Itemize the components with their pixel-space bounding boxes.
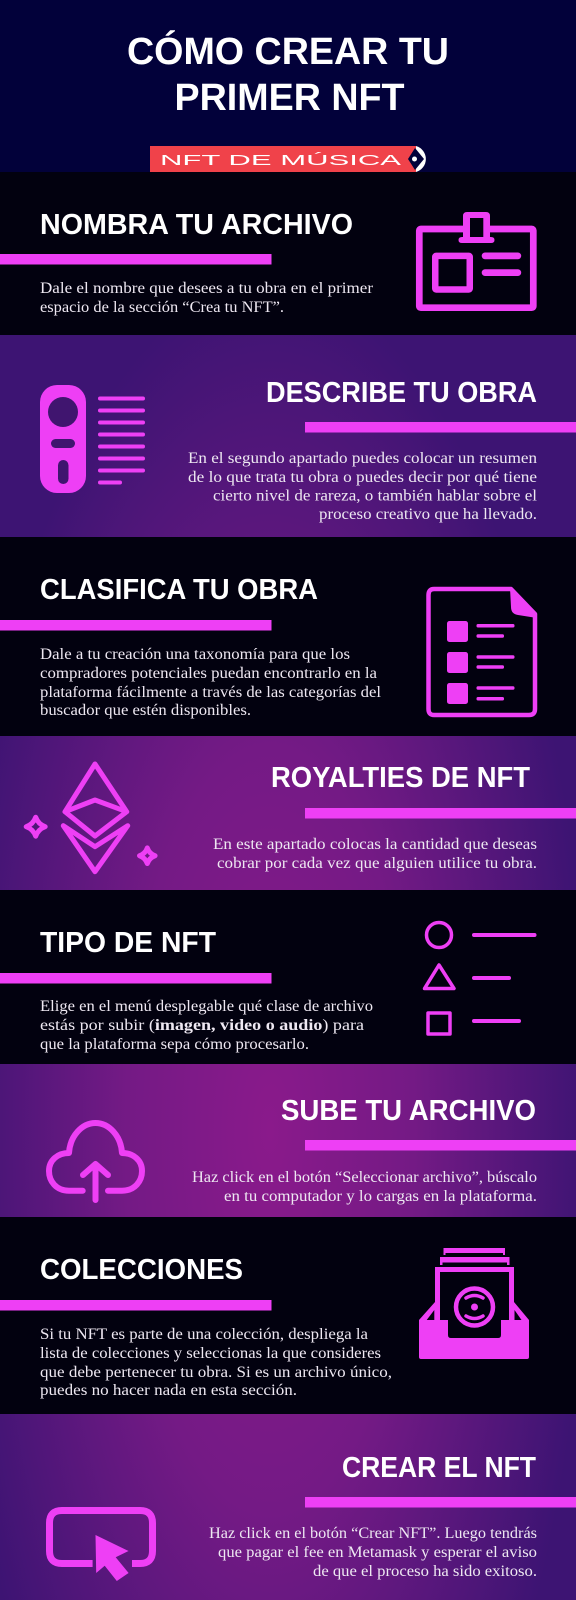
body text xyxy=(188,450,538,523)
accent bar xyxy=(0,973,272,984)
body text xyxy=(40,280,374,316)
icon: document with list xyxy=(428,588,537,715)
logo: NFT de Música xyxy=(150,146,426,172)
accent bar xyxy=(305,1140,576,1150)
panel: colecciones xyxy=(0,1217,576,1414)
body text: de que el proceso ha sido exitoso. xyxy=(313,1563,537,1580)
body text: que la plataforma sepa cómo procesarlo. xyxy=(40,1036,309,1053)
heading: ROYALTIES DE NFT xyxy=(271,762,530,794)
panel: nombra tu archivo xyxy=(0,172,576,335)
header band xyxy=(0,0,576,172)
body text xyxy=(40,998,373,1053)
panel: crear el nft xyxy=(0,1414,576,1600)
body text: Si tu NFT es parte de una colección, despliega la xyxy=(40,1326,368,1343)
body text: En este apartado colocas la cantidad que deseas xyxy=(213,836,537,853)
icon: ethereum with sparkles xyxy=(26,764,155,872)
body text: que pagar el fee en Metamask y esperar el aviso xyxy=(218,1544,537,1561)
body text: Haz click en el botón “Seleccionar archivo”, búscalo xyxy=(192,1169,537,1186)
panel: describe tu obra xyxy=(0,335,576,537)
body text: En el segundo apartado puedes colocar un resumen xyxy=(188,450,537,467)
body text xyxy=(40,1326,392,1399)
body text: en tu computador y lo cargas en la plataforma. xyxy=(224,1188,537,1205)
panel: sube tu archivo xyxy=(0,1064,576,1217)
body text: estás por subir ( imagen, video o audio ) para xyxy=(40,1017,364,1034)
heading: TIPO DE NFT xyxy=(40,927,216,959)
accent bar xyxy=(0,254,272,264)
heading: CLASIFICA TU OBRA xyxy=(40,574,318,606)
body text xyxy=(209,1525,537,1580)
body text: cierto nivel de rareza, o también hablar sobre el xyxy=(213,488,538,505)
body text xyxy=(213,836,537,872)
body text: Haz click en el botón “Crear NFT”. Luego tendrás xyxy=(209,1525,537,1542)
body text: compradores potenciales puedan encontrarlo en la xyxy=(40,665,377,682)
body text: puedes no hacer nada en esta sección. xyxy=(40,1382,297,1399)
icon: music remote and text lines xyxy=(40,385,145,493)
body text: espacio de la sección “Crea tu NFT”. xyxy=(40,299,284,316)
heading: CREAR EL NFT xyxy=(342,1452,536,1484)
panel: tipo de nft xyxy=(0,890,576,1064)
accent bar xyxy=(305,422,576,432)
body text: lista de colecciones y seleccionas la que consideres xyxy=(40,1345,381,1362)
accent bar xyxy=(0,1300,272,1310)
body text: que debe pertenecer tu obra. Si es un archivo único, xyxy=(40,1364,392,1381)
body text: de lo que trata tu obra o puedes decir por qué tiene xyxy=(188,469,537,486)
body text: proceso creativo que ha llevado. xyxy=(319,506,537,523)
accent bar xyxy=(0,620,272,630)
body text: Dale a tu creación una taxonomía para que los xyxy=(40,646,350,663)
body text xyxy=(192,1169,537,1205)
accent bar xyxy=(305,1497,576,1508)
title: PRIMER NFT xyxy=(174,77,404,119)
icon: cloud upload xyxy=(49,1123,142,1200)
panel: royalties de nft xyxy=(0,736,576,890)
body text: buscador que estén disponibles. xyxy=(40,702,251,719)
body text: Dale el nombre que desees a tu obra en el primer xyxy=(40,280,374,297)
accent bar xyxy=(305,808,576,818)
logo: NFT de Música: NFT DE MÚSICA xyxy=(160,152,401,169)
body text: cobrar por cada vez que alguien utilice tu obra. xyxy=(217,855,537,872)
heading: SUBE TU ARCHIVO xyxy=(281,1095,536,1127)
body text xyxy=(40,646,382,719)
heading: NOMBRA TU ARCHIVO xyxy=(40,209,353,241)
icon: inbox with record xyxy=(419,1248,529,1359)
icon: id badge xyxy=(419,212,533,308)
title: CÓMO CREAR TU xyxy=(127,29,449,73)
heading: DESCRIBE TU OBRA xyxy=(266,377,537,409)
panel: clasifica tu obra xyxy=(0,537,576,736)
body text: Elige en el menú desplegable qué clase de archivo xyxy=(40,998,373,1015)
body text: plataforma fácilmente a través de las categorías del xyxy=(40,684,382,701)
icon: button with cursor xyxy=(50,1510,152,1581)
icon: shapes list xyxy=(424,922,536,1034)
title xyxy=(127,29,449,119)
heading: COLECCIONES xyxy=(40,1254,243,1286)
